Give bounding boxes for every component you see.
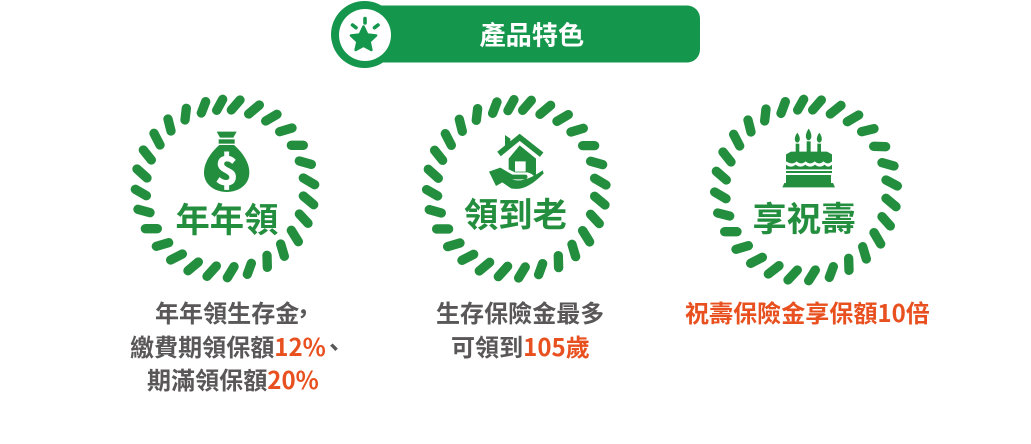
dashed ring: [135, 99, 315, 278]
icon: birthday cake: [782, 129, 835, 187]
caption: 祝壽保險金享保額10倍: [685, 294, 930, 329]
dashed ring: [715, 99, 897, 281]
panel: payout to old age: [427, 100, 606, 363]
banner bar: [365, 6, 700, 62]
caption: 期滿領保額20%: [147, 361, 319, 396]
caption: [130, 294, 346, 396]
panel: yearly payout: [130, 99, 346, 396]
label: 領到老: [464, 187, 567, 237]
heading: 產品特色: [480, 14, 584, 52]
caption: [436, 294, 604, 363]
header banner: [331, 1, 700, 68]
icon: money bag: [204, 132, 249, 196]
label: 享祝壽: [752, 191, 855, 241]
dashed ring: [427, 100, 606, 278]
caption: 繳費期領保額12%、: [130, 328, 346, 363]
caption: 可領到105歲: [451, 328, 590, 363]
label: 年年領: [176, 192, 278, 242]
caption: 年年領生存金，: [155, 294, 315, 329]
panel: celebration of longevity: [685, 99, 930, 329]
icon: money bag: $: [215, 140, 238, 196]
caption: 生存保險金最多: [436, 294, 604, 329]
icon: house in hand: [489, 135, 544, 189]
icon: star badge: [331, 1, 398, 68]
